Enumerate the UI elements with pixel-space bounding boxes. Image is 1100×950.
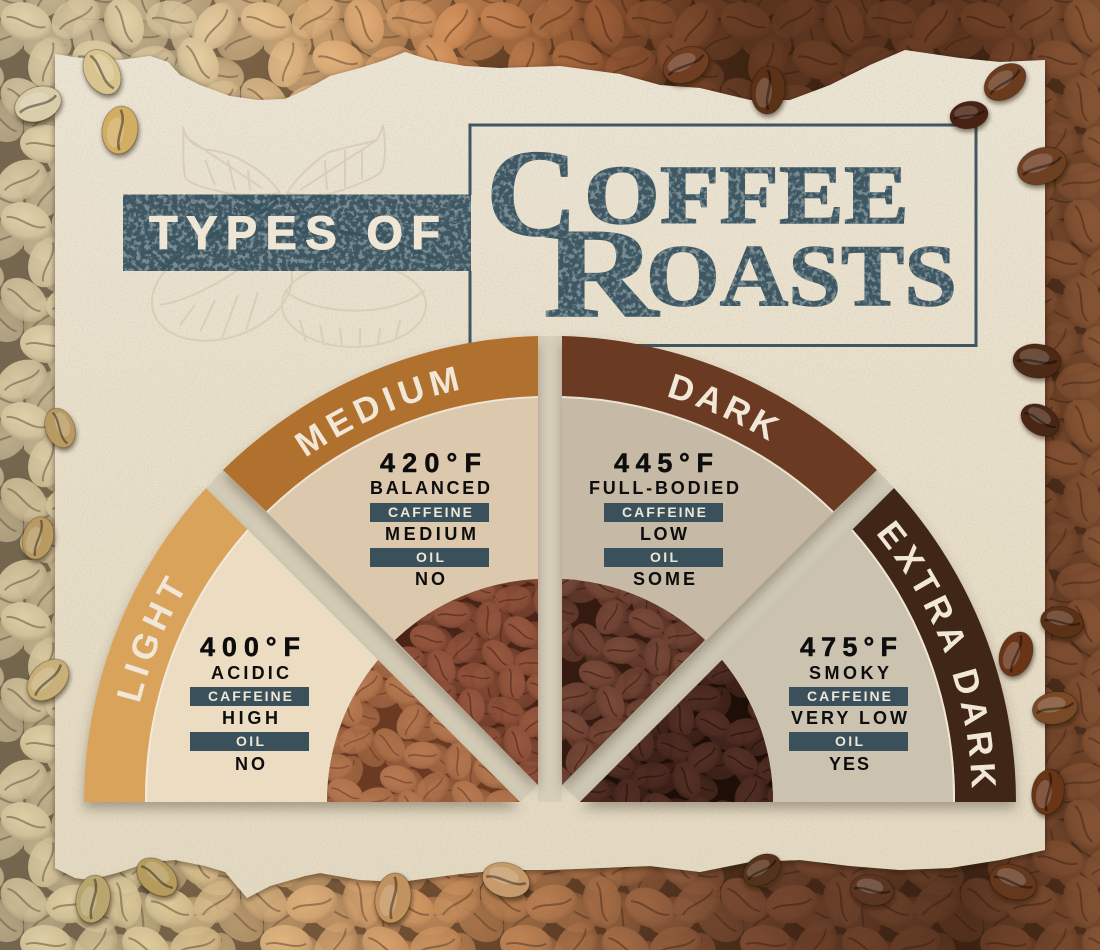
stats: medium roast: OIL bbox=[416, 549, 444, 565]
wedge: extra dark roast bbox=[578, 488, 1024, 817]
label: medium: MEDIUM bbox=[294, 366, 459, 456]
stats: dark roast: 445°F bbox=[614, 448, 713, 478]
stats: dark roast: FULL-BODIED bbox=[589, 478, 739, 498]
title: coffee roasts: OASTS bbox=[646, 228, 957, 325]
stats: extra dark roast bbox=[789, 632, 908, 774]
banner: types of bbox=[123, 193, 471, 271]
stats: light roast: CAFFEINE bbox=[208, 688, 292, 704]
stats: extra dark roast: CAFFEINE bbox=[807, 688, 891, 704]
stats: extra dark roast: OIL bbox=[835, 733, 863, 749]
title: coffee roasts: C bbox=[486, 125, 578, 262]
stats: light roast: 400°F bbox=[200, 632, 300, 662]
stats: medium roast: CAFFEINE bbox=[388, 504, 472, 520]
stats: medium roast bbox=[370, 448, 490, 589]
stats: medium roast: NO bbox=[415, 569, 445, 589]
stats: dark roast: LOW bbox=[640, 524, 687, 544]
stats: extra dark roast: VERY LOW bbox=[791, 708, 907, 728]
illustration: coffee leaves and beans sketch bbox=[139, 125, 426, 358]
stats: medium roast: BALANCED bbox=[370, 478, 490, 498]
stats: extra dark roast: 475°F bbox=[800, 632, 897, 662]
stats: light roast: OIL bbox=[236, 733, 264, 749]
stats: dark roast: CAFFEINE bbox=[622, 504, 706, 520]
stats: light roast: ACIDIC bbox=[211, 663, 289, 683]
wedge: light roast bbox=[76, 488, 522, 817]
stats: light roast bbox=[190, 632, 309, 774]
title: coffee roasts bbox=[486, 125, 957, 344]
wedge: medium roast bbox=[220, 336, 545, 794]
stats: light roast: HIGH bbox=[222, 708, 278, 728]
label: dark: DARK bbox=[668, 374, 780, 441]
stats: medium roast: MEDIUM bbox=[385, 524, 476, 544]
stats: extra dark roast: YES bbox=[829, 754, 869, 774]
title: coffee roasts: R bbox=[543, 202, 660, 344]
title frame bbox=[470, 125, 976, 346]
label: light: LIGHT bbox=[116, 575, 183, 702]
stats: light roast: NO bbox=[235, 754, 265, 774]
stats: dark roast: OIL bbox=[650, 549, 678, 565]
label: extra dark: EXTRA DARK bbox=[877, 520, 996, 788]
stats: dark roast bbox=[589, 448, 739, 589]
title: coffee roasts: OFFEE bbox=[584, 149, 909, 242]
wedge: dark roast bbox=[555, 336, 880, 794]
stats: dark roast: SOME bbox=[633, 569, 695, 589]
stats: medium roast: 420°F bbox=[380, 448, 481, 478]
paper gaps between wedges bbox=[206, 336, 894, 802]
stats: extra dark roast: SMOKY bbox=[809, 663, 889, 683]
banner: types of: TYPES OF bbox=[149, 206, 440, 259]
